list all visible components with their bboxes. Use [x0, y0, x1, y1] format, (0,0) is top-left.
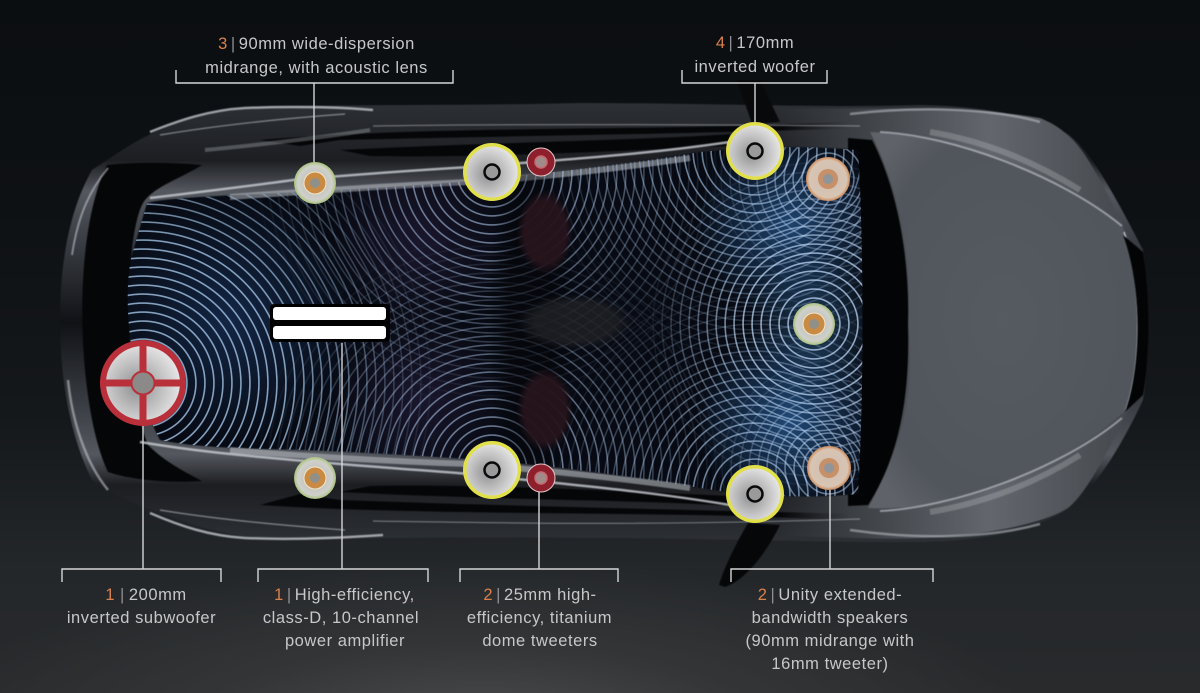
label: midrange: 3|90mm wide-dispersion	[218, 35, 415, 53]
rings: unity bottom	[722, 360, 862, 496]
speaker: tweeter bottom	[527, 464, 555, 492]
label: midrange: midrange, with acoustic lens	[205, 59, 428, 77]
connector lines and brackets	[62, 70, 933, 582]
hood and fender	[780, 108, 1137, 539]
label: amplifier: class-D, 10-channel	[263, 609, 419, 627]
silhouette	[60, 103, 1148, 542]
speaker: woofer top left	[463, 143, 521, 201]
label: subwoofer: inverted subwoofer	[67, 609, 216, 627]
label: amplifier: power amplifier	[285, 632, 405, 650]
rings: front door woofer bottom	[550, 288, 862, 496]
windshield	[848, 138, 908, 506]
amplifier	[270, 304, 390, 342]
label: tweeters: dome tweeters	[482, 632, 598, 650]
rings: subwoofer	[128, 190, 430, 456]
label: unity speakers: bandwidth speakers	[752, 609, 908, 627]
speaker: unity bottom	[807, 446, 851, 490]
rings: door woofer bottom left	[268, 246, 716, 490]
label: woofer: 4|170mm	[716, 34, 794, 52]
speaker: midrange center	[793, 303, 835, 345]
rings: door woofer top left	[269, 150, 716, 396]
speaker: subwoofer	[100, 340, 186, 426]
highlight bands	[68, 107, 1138, 539]
speaker: unity top	[806, 157, 850, 201]
speaker: woofer top right	[726, 122, 784, 180]
label: tweeters: 2|25mm high-	[483, 586, 597, 604]
speaker: woofer bottom left	[463, 441, 521, 499]
rear window	[82, 163, 202, 482]
speaker: woofer bottom right	[726, 465, 784, 523]
label: tweeters: efficiency, titanium	[467, 609, 612, 627]
front bumper edge	[1123, 235, 1148, 412]
right mirror	[719, 523, 780, 587]
left mirror	[737, 80, 780, 124]
rings: unity top	[720, 147, 862, 286]
label: unity speakers: (90mm midrange with	[745, 632, 915, 650]
cabin base	[128, 147, 862, 496]
sound wave rings inside cabin	[128, 147, 862, 496]
seats and console	[491, 172, 628, 466]
blue glow	[128, 148, 862, 496]
rings: center mid	[652, 162, 862, 486]
speaker: midrange bottom left	[294, 457, 336, 499]
rings: front door woofer top	[550, 147, 862, 358]
dark roof rail stripes	[260, 122, 860, 520]
label: unity speakers: 16mm tweeter)	[771, 655, 889, 673]
speaker: midrange top left	[294, 162, 336, 204]
label: woofer: inverted woofer	[694, 58, 816, 76]
label: unity speakers: 2|Unity extended-	[758, 586, 902, 604]
speaker: tweeter top	[527, 148, 555, 176]
label: subwoofer: 1 |200mm	[105, 586, 187, 604]
label: amplifier: 1|High-efficiency,	[274, 586, 415, 604]
